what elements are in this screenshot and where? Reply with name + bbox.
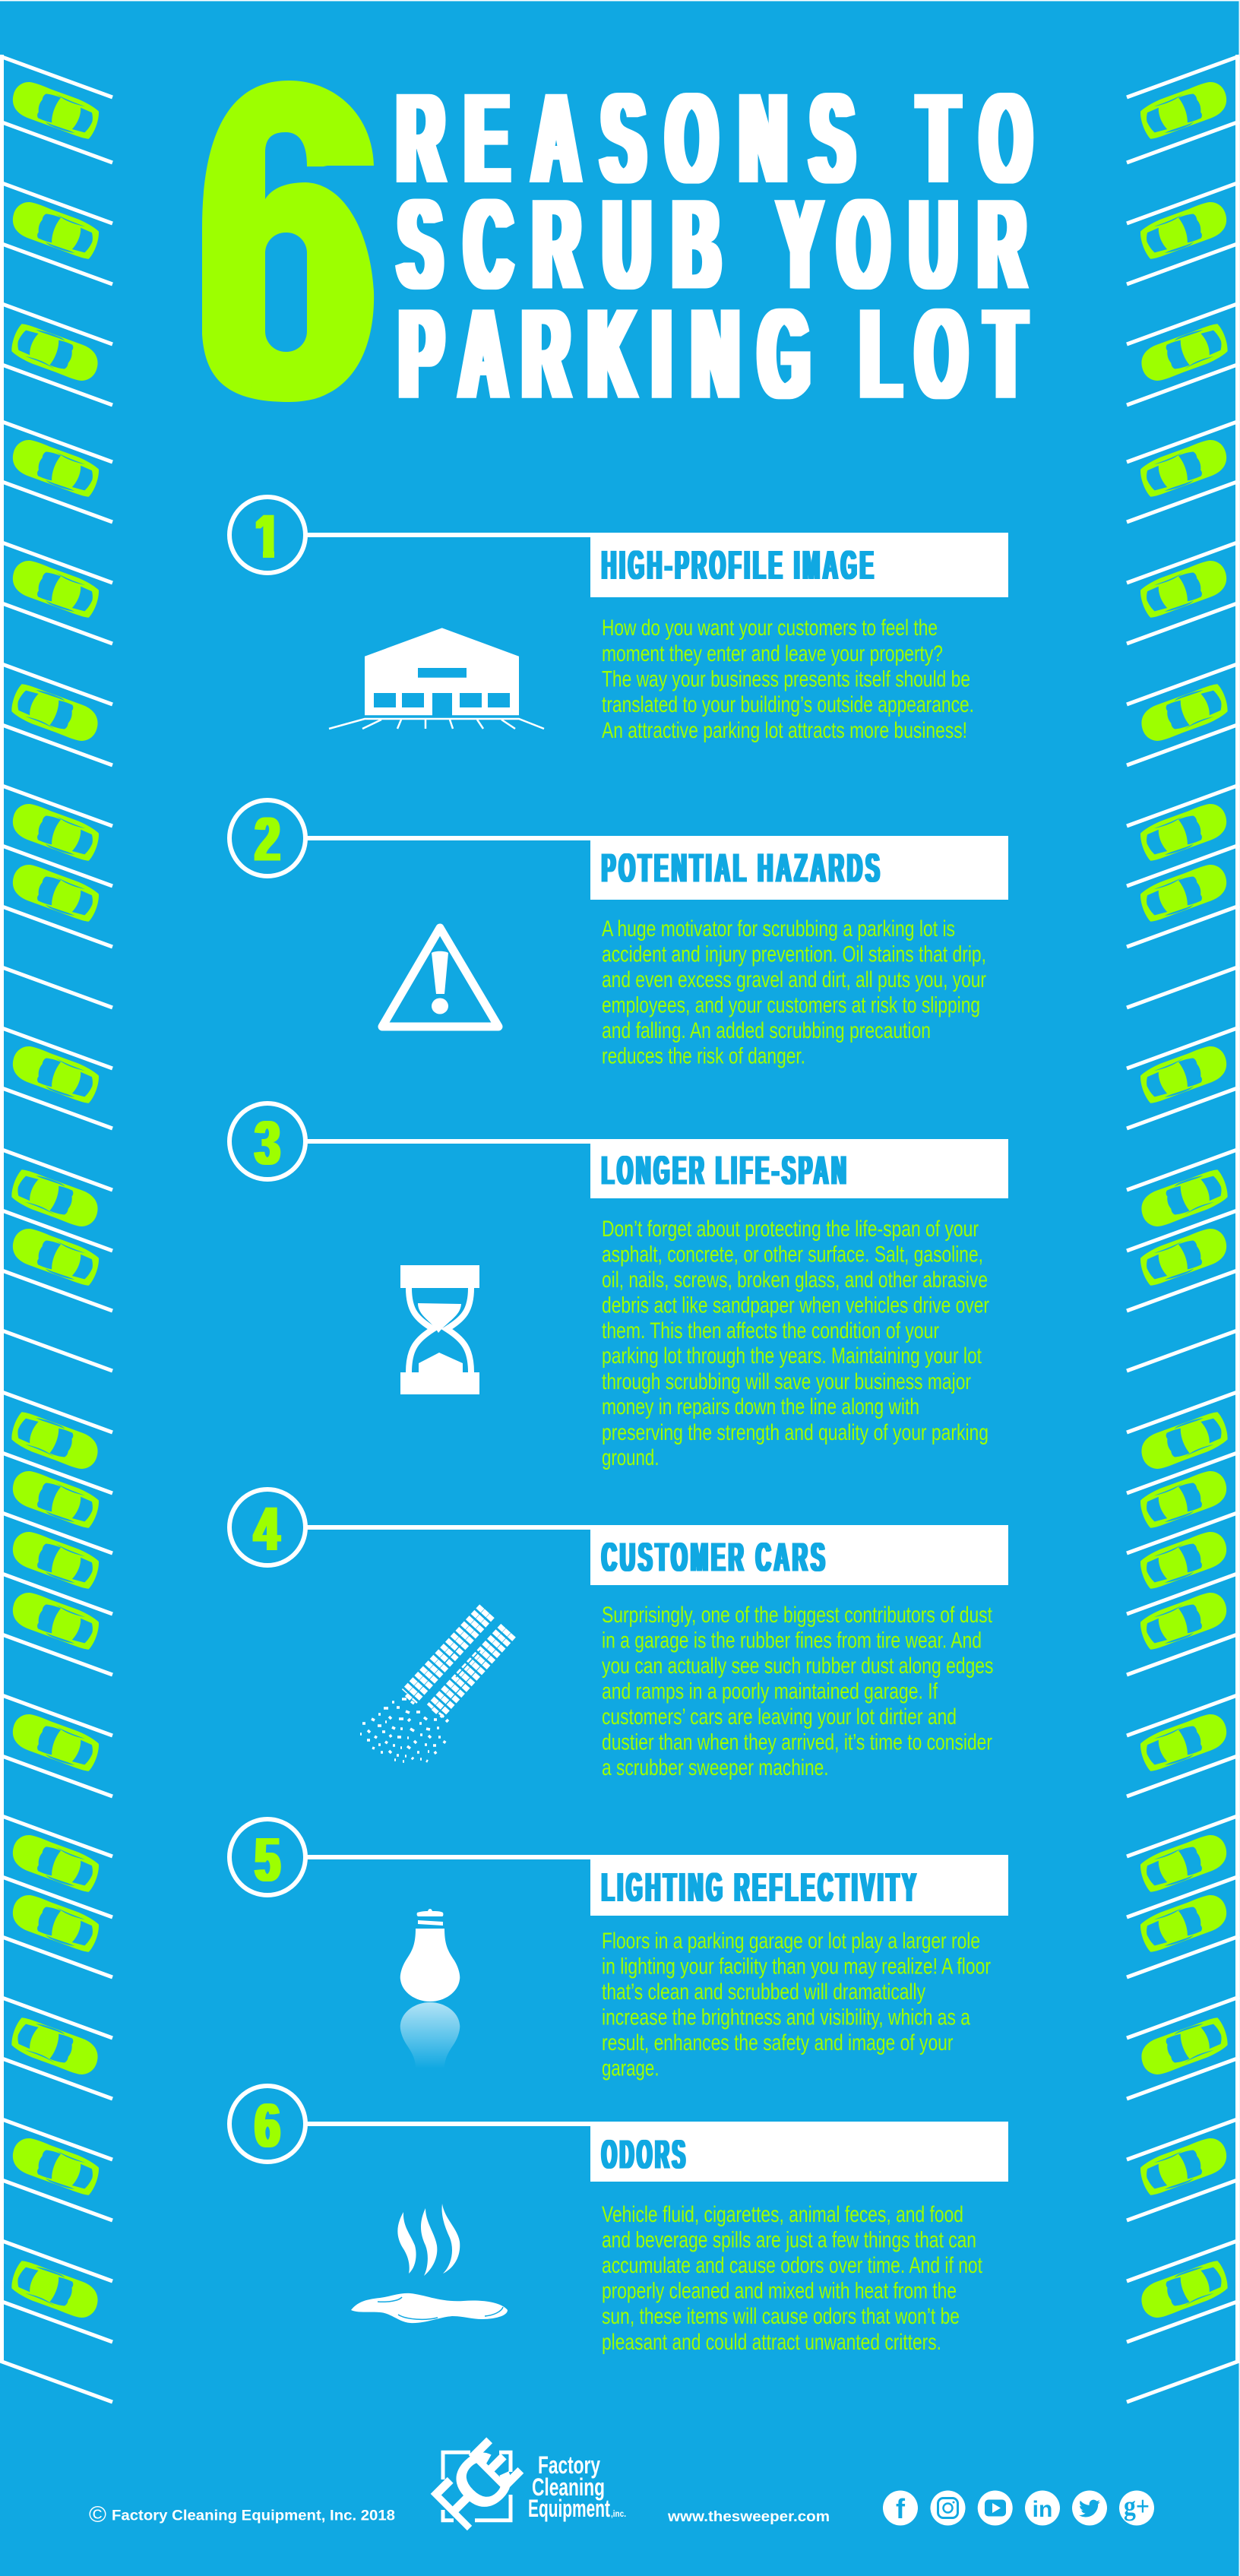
body text [602,616,974,743]
car [1137,556,1232,620]
body text: parking lot through the years. Maintaining your lot [602,1343,982,1369]
car [8,2258,103,2322]
footer: copyright: © [89,2502,106,2527]
car [1137,1588,1232,1652]
car [1137,1042,1232,1106]
body text: Surprisingly, one of the biggest contributors of dust [602,1603,993,1628]
footer: company logo: Equipment [528,2495,610,2522]
car [8,1410,103,1473]
car [1137,78,1232,141]
number badge 5: 5 [255,1825,280,1894]
item 5 [229,1819,1008,2081]
body text: in lighting your facility than you may realize! A floor [602,1954,991,1979]
body text: Floors in a parking garage or lot play a larger role [602,1929,980,1954]
number badge 4: 4 [255,1495,280,1564]
title: reasons to scrub your parking lot: PARKING LOT [400,283,1025,426]
heading panel: ODORS [602,2132,688,2178]
car [1137,1710,1232,1774]
item 6 [229,2086,1008,2355]
item 2 [229,800,1008,1068]
icon: linkedin [1025,2491,1060,2526]
car [1137,1467,1232,1530]
car [1137,799,1232,863]
car [8,1831,103,1894]
number badge 3 [229,1103,305,1179]
body text: oil, nails, screws, broken glass, and other abrasive [602,1267,988,1293]
heading panel [590,836,1008,900]
body text: sun, these items will cause odors that won’t be [602,2304,960,2329]
body text: How do you want your customers to feel the [602,616,938,641]
footer: company logo: Cleaning [532,2473,605,2501]
car [8,799,103,863]
footer: website: www.thesweeper.com [667,2509,830,2525]
icon: steaming puddle [351,2204,508,2323]
car [8,321,103,385]
icon: tire tracks and dust [360,1606,514,1761]
body text: money in repairs down the line along with [602,1394,919,1419]
body text: garage. [602,2056,660,2081]
footer: company logo: E [455,2424,536,2505]
body text: moment they enter and leave your property? [602,641,943,666]
body text: dustier than when they arrived, it’s time to consider [602,1729,992,1755]
car [8,860,103,924]
icon: light bulb with reflection [400,1909,460,2068]
footer: copyright [89,2502,395,2527]
number badge 3: 3 [255,1109,280,1178]
number badge 4 [229,1489,305,1565]
heading panel [590,1855,1008,1916]
car [8,556,103,620]
body text: Vehicle fluid, cigarettes, animal feces, and food [602,2202,963,2227]
icon: warning triangle [382,928,498,1027]
icon: building [329,628,544,729]
footer: company logo: F [417,2465,497,2544]
icon: google plus: g+ [1124,2491,1150,2521]
car [1137,198,1232,261]
number badge 1: 1 [255,502,280,571]
body text: them. This then affects the condition of your [602,1318,939,1343]
heading panel [590,1139,1008,1198]
heading panel: CUSTOMER CARS [602,1535,828,1581]
number badge 6 [229,2086,305,2162]
car [1137,1891,1232,1954]
footer: company logo [417,2424,626,2544]
car [1137,1527,1232,1591]
item 4 [229,1489,1008,1780]
body text: increase the brightness and visibility, which as a [602,2005,970,2030]
body text: translated to your building’s outside appearance. [602,692,974,717]
body text: ground. [602,1445,660,1470]
car [1137,682,1232,745]
body text: and even excess gravel and dirt, all puts you, your [602,967,986,992]
footer: company logo: C [433,2432,531,2530]
car [8,1224,103,1288]
body text: debris act like sandpaper when vehicles drive over [602,1293,989,1318]
car [8,2134,103,2198]
icon: hourglass [400,1265,479,1394]
title: big number 6: 6 [202,0,369,491]
parking lot: right column [1127,55,1239,2402]
number badge 2: 2 [255,805,280,875]
car [1137,1831,1232,1894]
car [8,1527,103,1591]
car [1137,321,1232,385]
title: reasons to scrub your parking lot: REASONS TO [397,67,1031,210]
car [1137,860,1232,924]
parking lot: left column [0,55,112,2402]
body text: employees, and your customers at risk to slipping [602,992,980,1018]
heading panel: POTENTIAL HAZARDS [602,845,883,891]
car [8,1588,103,1652]
car [1137,1410,1232,1473]
body text: in a garage is the rubber fines from tire wear. And [602,1628,982,1654]
heading panel: HIGH-PROFILE IMAGE [602,543,877,588]
item 3 [229,1103,1008,1470]
car [8,198,103,261]
body text [602,1603,994,1780]
number badge 2 [229,800,305,876]
car [8,1467,103,1530]
title: reasons to scrub your parking lot [397,67,1031,426]
body text: A huge motivator for scrubbing a parking lot is [602,916,955,941]
car [1137,435,1232,499]
footer: company logo: Factory [538,2451,600,2479]
title: reasons to scrub your parking lot: SCRUB YOUR [399,173,1025,316]
body text: accumulate and cause odors over time. And if not [602,2253,983,2278]
number badge 1 [229,497,305,573]
body text: that’s clean and scrubbed will dramatically [602,1979,925,2005]
icon: facebook [883,2491,918,2526]
car [8,1042,103,1106]
icon: twitter [1072,2491,1107,2526]
icon: youtube [978,2491,1013,2526]
car [8,435,103,499]
body text: and falling. An added scrubbing precaution [602,1018,931,1043]
body text: The way your business presents itself should be [602,667,970,691]
car [8,1891,103,1954]
body text [602,916,986,1068]
body text [602,1217,989,1470]
body text: a scrubber sweeper machine. [602,1755,829,1780]
body text: through scrubbing will save your business major [602,1369,971,1394]
heading panel: LONGER LIFE-SPAN [602,1147,849,1193]
body text: An attractive parking lot attracts more business! [602,718,967,743]
body text: pleasant and could attract unwanted critters. [602,2330,941,2355]
heading panel [590,533,1008,597]
body text: and beverage spills are just a few things that can [602,2228,976,2252]
car [8,1167,103,1231]
car [1137,2258,1232,2322]
car [1137,1167,1232,1231]
car [8,78,103,141]
heading panel [590,1525,1008,1585]
body text: accident and injury prevention. Oil stains that drip, [602,942,986,967]
number badge 6: 6 [255,2091,280,2160]
car [8,682,103,745]
body text: preserving the strength and quality of your parking [602,1420,989,1445]
footer: company logo: ,inc. [611,2508,626,2519]
car [8,2015,103,2079]
body text: asphalt, concrete, or other surface. Salt, gasoline, [602,1242,983,1267]
body text [602,1929,991,2081]
icon: instagram [930,2491,965,2526]
car [1137,1224,1232,1288]
car [8,1710,103,1774]
body text: you can actually see such rubber dust along edges [602,1654,994,1679]
icon: linkedin: in [1033,2497,1052,2522]
icon: facebook: f [896,2493,906,2524]
footer: social icons [883,2491,1154,2526]
body text: customers’ cars are leaving your lot dirtier and [602,1704,957,1729]
body text: reduces the risk of danger. [602,1044,805,1068]
number badge 5 [229,1819,305,1895]
body text: result, enhances the safety and image of your [602,2030,954,2055]
footer: copyright: Factory Cleaning Equipment, Inc. 2018 [112,2508,395,2524]
heading panel [590,2122,1008,2182]
body text: and ramps in a poorly maintained garage. If [602,1679,938,1704]
car [1137,2134,1232,2198]
item 1 [229,497,1008,743]
car [1137,2015,1232,2079]
body text: Don’t forget about protecting the life-span of your [602,1217,979,1242]
heading panel: LIGHTING REFLECTIVITY [602,1865,919,1910]
body text [602,2202,983,2355]
body text: properly cleaned and mixed with heat from the [602,2278,957,2304]
